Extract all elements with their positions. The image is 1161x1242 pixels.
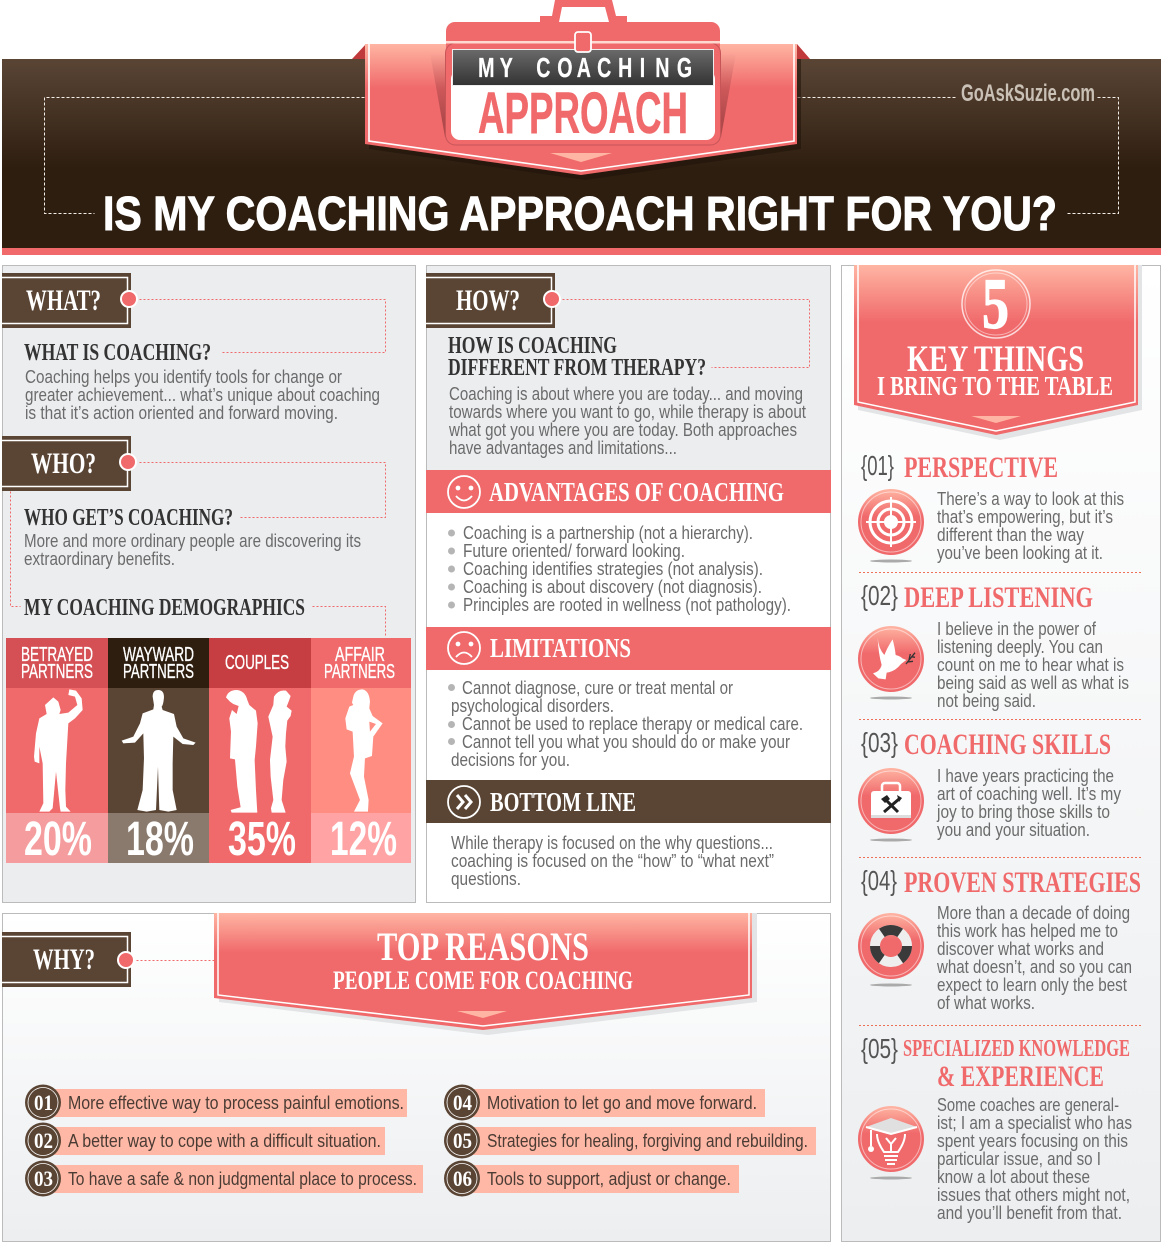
text: what is coaching: is that it’s action oriented and forward moving. [25,403,338,423]
item 05: specialized knowledge [858,1033,1132,1223]
reason 04: 04 [453,1090,472,1115]
item 02: deep listening: DEEP LISTENING [904,581,1093,614]
text: how: have advantages and limitations... [449,438,677,458]
ribbon: top reasons: PEOPLE COME FOR COACHING [333,966,633,995]
item 04: proven strategies: of what works. [937,993,1035,1013]
item 02: deep listening [858,580,1129,711]
column: couples [209,638,311,866]
icon: double chevron [448,786,480,818]
item 03: coaching skills: joy to bring those skills to [936,802,1110,822]
item 05: specialized knowledge: particular issue, and so I [937,1149,1101,1169]
reason 01: 01 [34,1090,53,1115]
item 02: deep listening: being said as well as what is [937,673,1129,693]
section: advantages: ADVANTAGES OF COACHING [489,477,784,507]
item 03: coaching skills: you and your situation. [937,820,1090,840]
tag: why: WHY? [33,943,95,976]
column: couples: 35% [228,813,296,866]
icon: lifebuoy [858,913,924,986]
section: advantages [426,470,831,627]
column: wayward partners: WAYWARD [123,644,194,666]
heading: what is coaching: WHAT IS COACHING? [24,340,211,366]
item 01: perspective: There’s a way to look at this [937,489,1124,509]
item 04: proven strategies: expect to learn only the best [937,975,1127,995]
text: bottom line: While therapy is focused on the why questions... [451,833,773,853]
list: limitations [448,678,803,770]
list: limitations: Cannot diagnose, cure or treat mental or [462,678,733,698]
heading: how is coaching different [448,333,706,381]
section: limitations [426,627,831,780]
item 05: specialized knowledge: Some coaches are general- [937,1095,1119,1115]
item 05: specialized knowledge: and you’ll benefit from that. [937,1203,1122,1223]
reason 02 [25,1122,385,1158]
tag: how: HOW? [456,284,520,317]
text: what is coaching: Coaching helps you identify tools for change or [25,367,342,387]
list: limitations: psychological disorders. [451,696,614,716]
column: affair partners: 12% [330,813,397,866]
icon: target [858,489,924,562]
icon: dove [858,626,924,700]
icon: smiley [448,476,480,508]
ribbon: 5 key things: 5 [982,264,1009,344]
reason 02: A better way to cope with a difficult situation. [68,1131,381,1151]
panel: what and who [2,266,416,902]
list: advantages: Future oriented/ forward looking. [463,541,685,561]
text: how [448,384,806,458]
column: affair partners [311,638,411,866]
panel: why [2,913,830,1242]
reason 02: 02 [34,1128,53,1153]
reason 05 [444,1122,816,1158]
reason 06: Tools to support, adjust or change. [487,1169,731,1189]
icon: graduation cap and bulb [858,1106,924,1180]
site name: GoAskSuzie.com [961,80,1095,107]
list: limitations: decisions for you. [451,750,570,770]
reason 01 [25,1084,407,1120]
column: betrayed partners: BETRAYED [21,644,93,666]
heading: demographics: MY COACHING DEMOGRAPHICS [24,595,305,621]
logo text: MY COACHING [478,53,692,84]
text: how: what got you where you are today. Both approaches [448,420,797,440]
text: who gets coaching [24,531,361,569]
reason 01: More effective way to process painful emotions. [68,1093,404,1113]
list: advantages: Coaching identifies strategies (not analysis). [463,559,763,579]
item 02: deep listening: I believe in the power of [937,619,1097,639]
list: advantages [448,523,791,615]
tag: how [426,273,560,328]
item 02: deep listening: not being said. [937,691,1036,711]
reason 03 [25,1160,423,1196]
logo ribbon with briefcase [352,0,810,180]
text: what is coaching: greater achievement... what’s unique about coaching [25,385,380,405]
ribbon: 5 key things: KEY THINGS [907,339,1084,380]
item 05: specialized knowledge: spent years focusing on this [937,1131,1128,1151]
item 04: proven strategies: this work has helped me to [937,921,1118,941]
list: limitations: Cannot be used to replace therapy or medical care. [462,714,803,734]
item 01: perspective: that’s empowering, but it’s [937,507,1113,527]
column: betrayed partners: PARTNERS [21,661,93,683]
tag: who: WHO? [31,447,96,480]
item 05: specialized knowledge: know a lot about these [937,1167,1090,1187]
tag: why [2,932,134,987]
section: limitations: LIMITATIONS [490,633,631,663]
header band [2,59,1161,255]
item 02: deep listening: listening deeply. You can [937,637,1103,657]
tag: what [2,273,137,328]
text: who gets coaching: More and more ordinary people are discovering its [24,531,361,551]
reason 03: 03 [34,1166,53,1191]
text: bottom line [451,833,774,889]
text: who gets coaching: extraordinary benefits. [24,549,175,569]
section: bottom line: BOTTOM LINE [490,787,636,817]
dotted connectors [10,300,386,636]
column: wayward partners [108,638,209,866]
tag: who [2,436,136,491]
item 03: coaching skills: I have years practicing the [937,766,1114,786]
heading: who gets coaching: WHO GET’S COACHING? [24,505,233,531]
reason 04: Motivation to let go and move forward. [487,1093,757,1113]
text: bottom line: coaching is focused on the “how” to “what next” [451,851,774,871]
list: advantages: Coaching is a partnership (not a hierarchy). [463,523,753,543]
reason 04 [444,1084,765,1120]
text: how: towards where you want to go, while therapy is about [449,402,806,422]
item 05: specialized knowledge: ist; I am a specialist who has [937,1113,1132,1133]
heading: how is coaching different: HOW IS COACHING [448,333,617,359]
item 02: deep listening: {02} [861,580,898,611]
item 03: coaching skills: art of coaching well. It’s my [937,784,1121,804]
ribbon: top reasons [214,913,757,1035]
reason 06 [444,1160,739,1196]
item 05: specialized knowledge: {05} [861,1033,898,1064]
reason 03: To have a safe & non judgmental place to process. [68,1169,417,1189]
text: bottom line: questions. [451,869,521,889]
column: betrayed partners [6,638,108,866]
list: limitations: Cannot tell you what you should do or make your [462,732,790,752]
item 01: perspective: different than the way [937,525,1084,545]
item 05: specialized knowledge: & EXPERIENCE [937,1060,1104,1093]
icon: toolbox [858,768,924,842]
reason 05: Strategies for healing, forgiving and rebuilding. [487,1131,808,1151]
column: wayward partners: PARTNERS [123,661,194,683]
panel: how [426,266,831,902]
item 04: proven strategies: {04} [861,865,897,896]
chart: demographics [6,638,411,866]
item 05: specialized knowledge: issues that others might not, [937,1185,1130,1205]
column: affair partners: AFFAIR [335,644,385,666]
item 04: proven strategies: discover what works and [937,939,1104,959]
heading: how is coaching different: DIFFERENT FROM THERAPY? [448,355,706,381]
reason 06: 06 [453,1166,472,1191]
list: advantages: Principles are rooted in wellness (not pathology). [463,595,791,615]
logo word: APPROACH [478,81,688,146]
tag: what: WHAT? [26,284,101,317]
briefcase handle [540,0,627,24]
briefcase body [446,22,720,145]
ribbon: 5 key things [854,264,1142,440]
item 03: coaching skills [858,727,1121,842]
item 01: perspective [858,450,1124,563]
item 01: perspective: PERSPECTIVE [904,451,1058,484]
item 01: perspective: you’ve been looking at it. [937,543,1103,563]
column: couples: COUPLES [225,652,289,674]
item 04: proven strategies: More than a decade of doing [937,903,1130,923]
text: what is coaching [25,367,380,423]
icon: frown [448,632,480,664]
item 01: perspective: {01} [861,450,894,481]
text: how: Coaching is about where you are today... and moving [449,384,803,404]
column: betrayed partners: 20% [24,813,92,866]
item 02: deep listening: count on me to hear what is [937,655,1124,675]
section: bottom line [426,780,831,902]
reason 05: 05 [453,1128,472,1153]
item 04: proven strategies [858,865,1141,1013]
list: advantages: Coaching is about discovery (not diagnosis). [463,577,762,597]
ribbon: top reasons: TOP REASONS [377,924,589,969]
item 03: coaching skills: {03} [861,727,898,758]
panel: five key things [842,264,1160,1242]
column: affair partners: PARTNERS [324,661,395,683]
column: wayward partners: 18% [126,813,194,866]
